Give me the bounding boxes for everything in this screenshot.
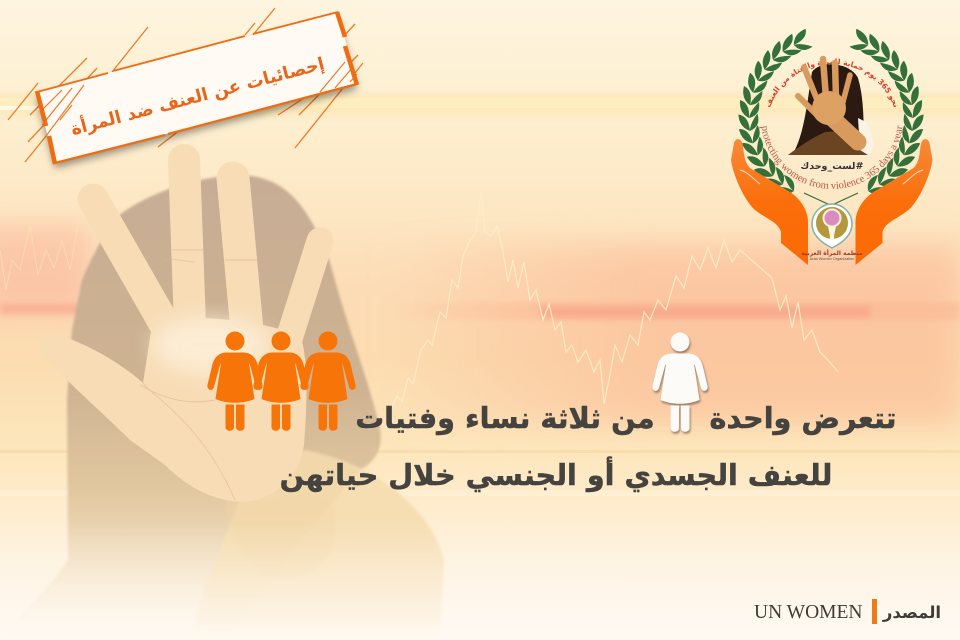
- banner title text: إحصائيات عن العنف ضد المرأة: [68, 52, 327, 140]
- statement line 1: تتعرض واحدة: [710, 401, 896, 435]
- sleeve: [190, 450, 444, 640]
- title banner: [8, 8, 363, 164]
- hand: [39, 160, 320, 502]
- photo: hooded figure with raised hand: [0, 160, 960, 640]
- hood: [0, 175, 381, 640]
- white woman icon: [652, 332, 708, 432]
- source credit: UN WOMEN: [754, 602, 863, 623]
- logo photo: woman with raised hand: [788, 59, 873, 155]
- fade to bottom: [0, 520, 960, 640]
- source credit: [754, 599, 941, 624]
- corner hatch lines: [40, 62, 357, 136]
- left orange hand: [731, 139, 808, 265]
- laurel wreath: [738, 29, 924, 205]
- forearm: [225, 492, 336, 580]
- banner frame: [37, 12, 357, 164]
- organisation name: منظمة المرأة العربية: [801, 249, 863, 257]
- orange women icons (three): [207, 332, 356, 431]
- banner card: [36, 13, 357, 163]
- statement line 1: من ثلاثة نساء وفتيات: [355, 401, 655, 435]
- right orange hand: [856, 139, 932, 265]
- logo: protecting women from violence 365 days a year: [759, 126, 902, 189]
- statement line 1: [355, 401, 896, 435]
- logo hashtag: #لست_وحدك: [801, 161, 864, 172]
- Arab Women Organization emblem: [812, 204, 852, 248]
- logo: نحو 365 يوم حماية للمرأة والفتاة من العنف: [768, 58, 898, 108]
- source credit: المصدر: [882, 603, 941, 622]
- logo: Arab Women Organization: [810, 257, 854, 261]
- circular slogans: [766, 64, 898, 130]
- statement line 2: للعنف الجسدي أو الجنسي خلال حياتهن: [280, 456, 832, 492]
- diagonal strokes behind banner: [8, 8, 363, 162]
- logo: [731, 28, 932, 265]
